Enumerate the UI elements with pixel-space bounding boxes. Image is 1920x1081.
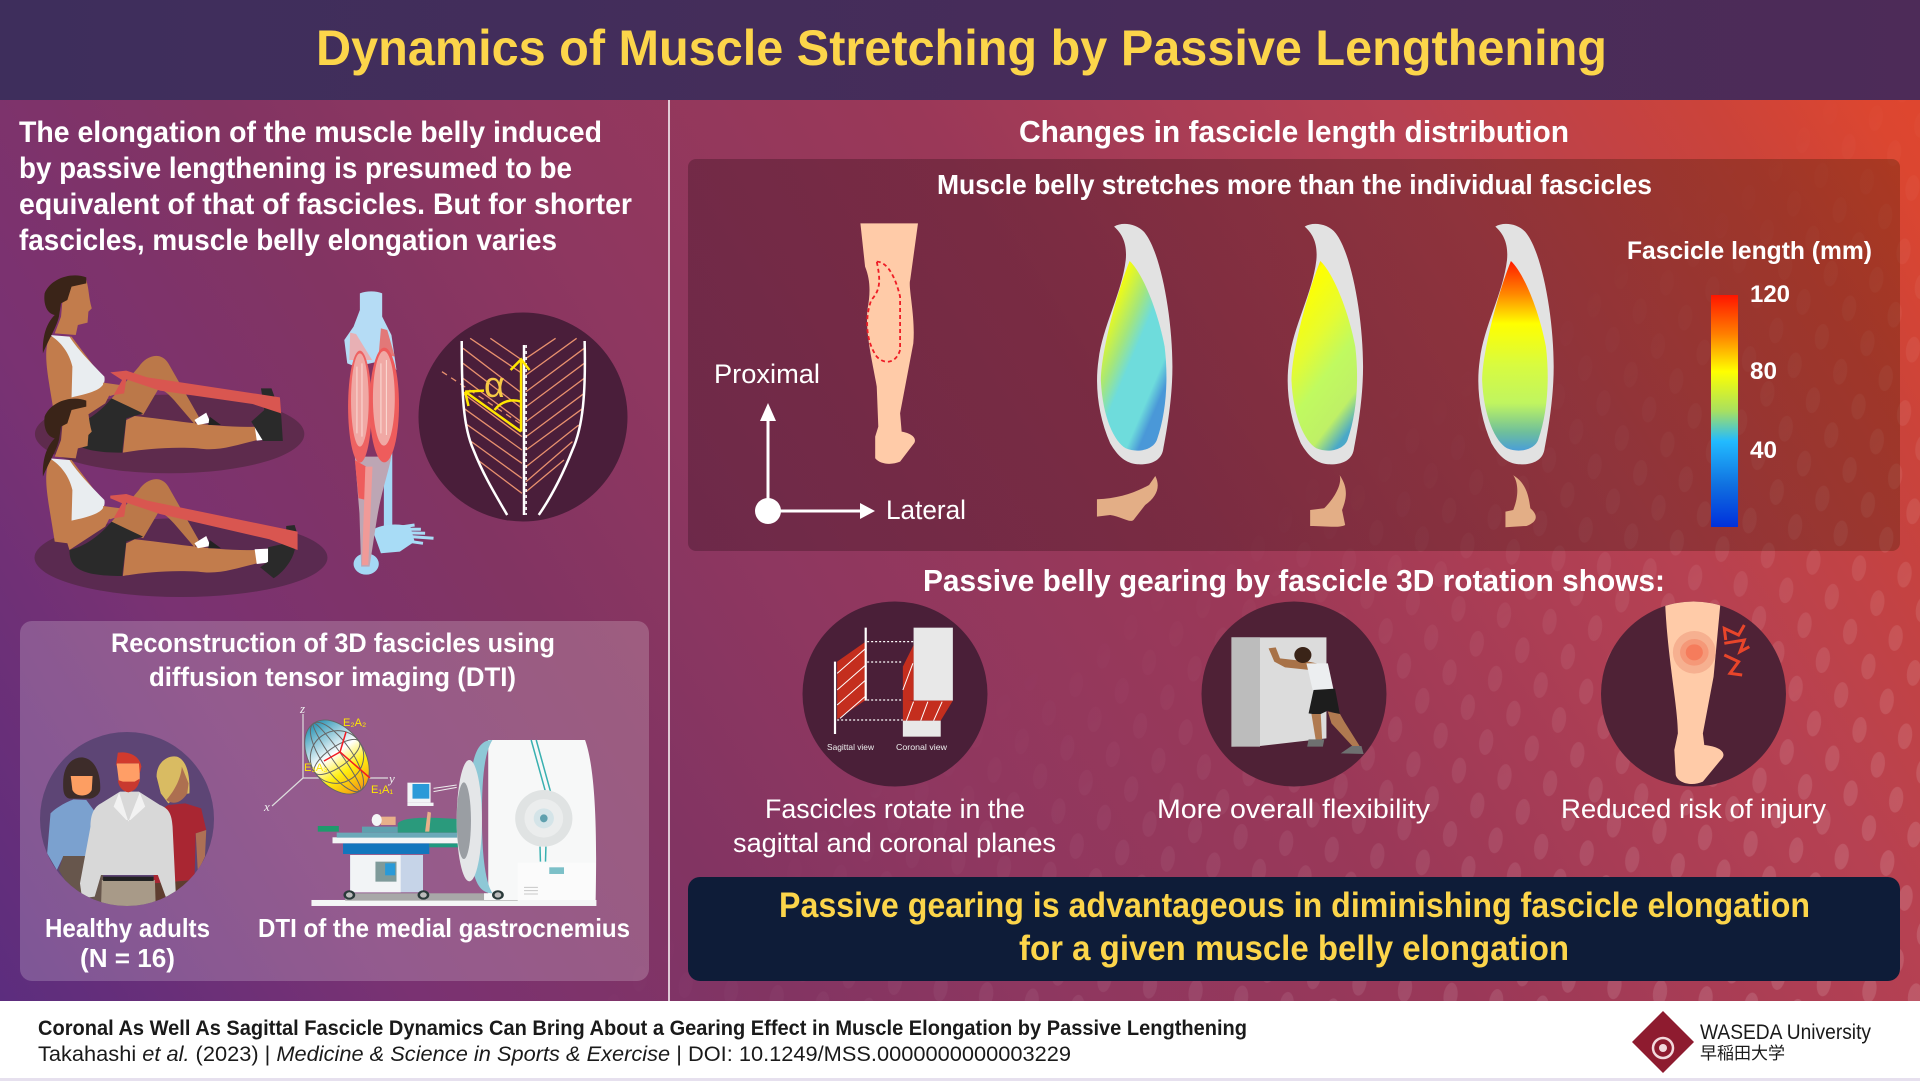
chart: muscle map at dorsiflexion <box>1478 224 1554 527</box>
legend: fascicle length colour scale <box>1627 237 1872 527</box>
label: alpha: α <box>484 364 505 405</box>
finding: fascicles rotate: Sagittal view <box>827 742 875 752</box>
chart: diffusion tensor ellipsoid <box>263 701 395 814</box>
chart: diffusion tensor ellipsoid: E₃A₃ <box>304 762 328 774</box>
footer citation <box>0 1001 1920 1081</box>
arrows: anatomical axes <box>755 403 875 524</box>
label: healthy adults <box>45 913 210 973</box>
panel subheading: Muscle belly stretches more than the individual fascicles <box>937 169 1652 200</box>
label: proximal: Proximal <box>714 359 820 389</box>
intro text: by passive lengthening is presumed to be <box>19 152 572 185</box>
finding: fascicles rotate <box>733 602 1056 858</box>
icon: pennation angle diagram <box>418 312 628 522</box>
chart: diffusion tensor ellipsoid: x <box>263 799 270 814</box>
intro text <box>19 116 632 257</box>
title: Dynamics of Muscle Stretching by Passive Lengthening <box>316 20 1607 76</box>
title banner <box>0 0 1920 100</box>
panel heading <box>111 628 555 692</box>
panel: fascicle length distribution <box>688 159 1900 551</box>
panel heading: diffusion tensor imaging (DTI) <box>149 662 516 692</box>
chart: diffusion tensor ellipsoid: E₂A₂ <box>343 717 366 729</box>
label: fascicles rotate: sagittal and coronal planes <box>733 828 1056 858</box>
logo: Waseda University <box>1632 1011 1871 1073</box>
callout: conclusion: Passive gearing is advantageous in diminishing fascicle elongation <box>779 886 1810 925</box>
legend: fascicle length colour scale: 40 <box>1750 437 1777 464</box>
finding: more flexibility <box>1157 602 1431 824</box>
logo: Waseda University: WASEDA University <box>1700 1021 1871 1044</box>
illustration: lower leg with dashed muscle outline <box>860 223 918 464</box>
chart: diffusion tensor ellipsoid: z <box>299 701 305 716</box>
footer citation: Coronal As Well As Sagittal Fascicle Dynamics Can Bring About a Gearing Effect in Muscle Elongation by Passive Lengthening <box>38 1017 1247 1040</box>
legend: fascicle length colour scale: 80 <box>1750 358 1777 385</box>
chart: muscle map at plantarflexion <box>1097 224 1172 521</box>
logo: Waseda University: 早稲田大学 <box>1700 1044 1785 1063</box>
legend: fascicle length colour scale: 120 <box>1750 281 1790 308</box>
finding: reduced injury risk <box>1561 600 1826 824</box>
heading: passive belly gearing: Passive belly gearing by fascicle 3D rotation shows: <box>923 563 1665 598</box>
illustration: calf muscle anatomy <box>344 291 434 575</box>
heading: changes in fascicle length: Changes in fascicle length distribution <box>1019 114 1569 149</box>
label: lateral: Lateral <box>886 495 966 525</box>
chart: diffusion tensor ellipsoid: E₁A₁ <box>371 784 393 796</box>
label: reduced risk of injury: Reduced risk of injury <box>1561 794 1826 824</box>
footer citation: Takahashi et al. (2023) | Medicine & Science in Sports & Exercise | DOI: 10.1249/MSS.0000000000003229 <box>38 1043 1071 1066</box>
panel: reconstruction of 3D fascicles <box>20 621 649 981</box>
finding: fascicles rotate: Coronal view <box>896 742 948 752</box>
panel heading: Reconstruction of 3D fascicles using <box>111 628 555 658</box>
label: fascicles rotate: Fascicles rotate in the <box>765 794 1025 824</box>
chart: muscle map at neutral <box>1288 224 1363 527</box>
label: fascicles rotate <box>733 794 1056 858</box>
chart: diffusion tensor ellipsoid: y <box>387 771 395 786</box>
callout: conclusion <box>688 877 1900 981</box>
label: DTI of the medial gastrocnemius: DTI of the medial gastrocnemius <box>258 913 630 943</box>
intro text: The elongation of the muscle belly induced <box>19 116 602 149</box>
icon: healthy adults group <box>40 732 214 907</box>
legend: fascicle length colour scale: Fascicle length (mm) <box>1627 237 1872 265</box>
intro text: fascicles, muscle belly elongation varies <box>19 224 557 257</box>
illustration: MRI scanner with patient <box>311 740 596 906</box>
label: healthy adults: Healthy adults <box>45 913 210 943</box>
illustration: seated band stretch, two women <box>35 275 327 597</box>
label: more overall flexibility: More overall flexibility <box>1157 794 1431 824</box>
callout: conclusion: for a given muscle belly elongation <box>1019 929 1569 968</box>
label: healthy adults: (N = 16) <box>80 943 175 973</box>
intro text: equivalent of that of fascicles. But for shorter <box>19 188 632 221</box>
